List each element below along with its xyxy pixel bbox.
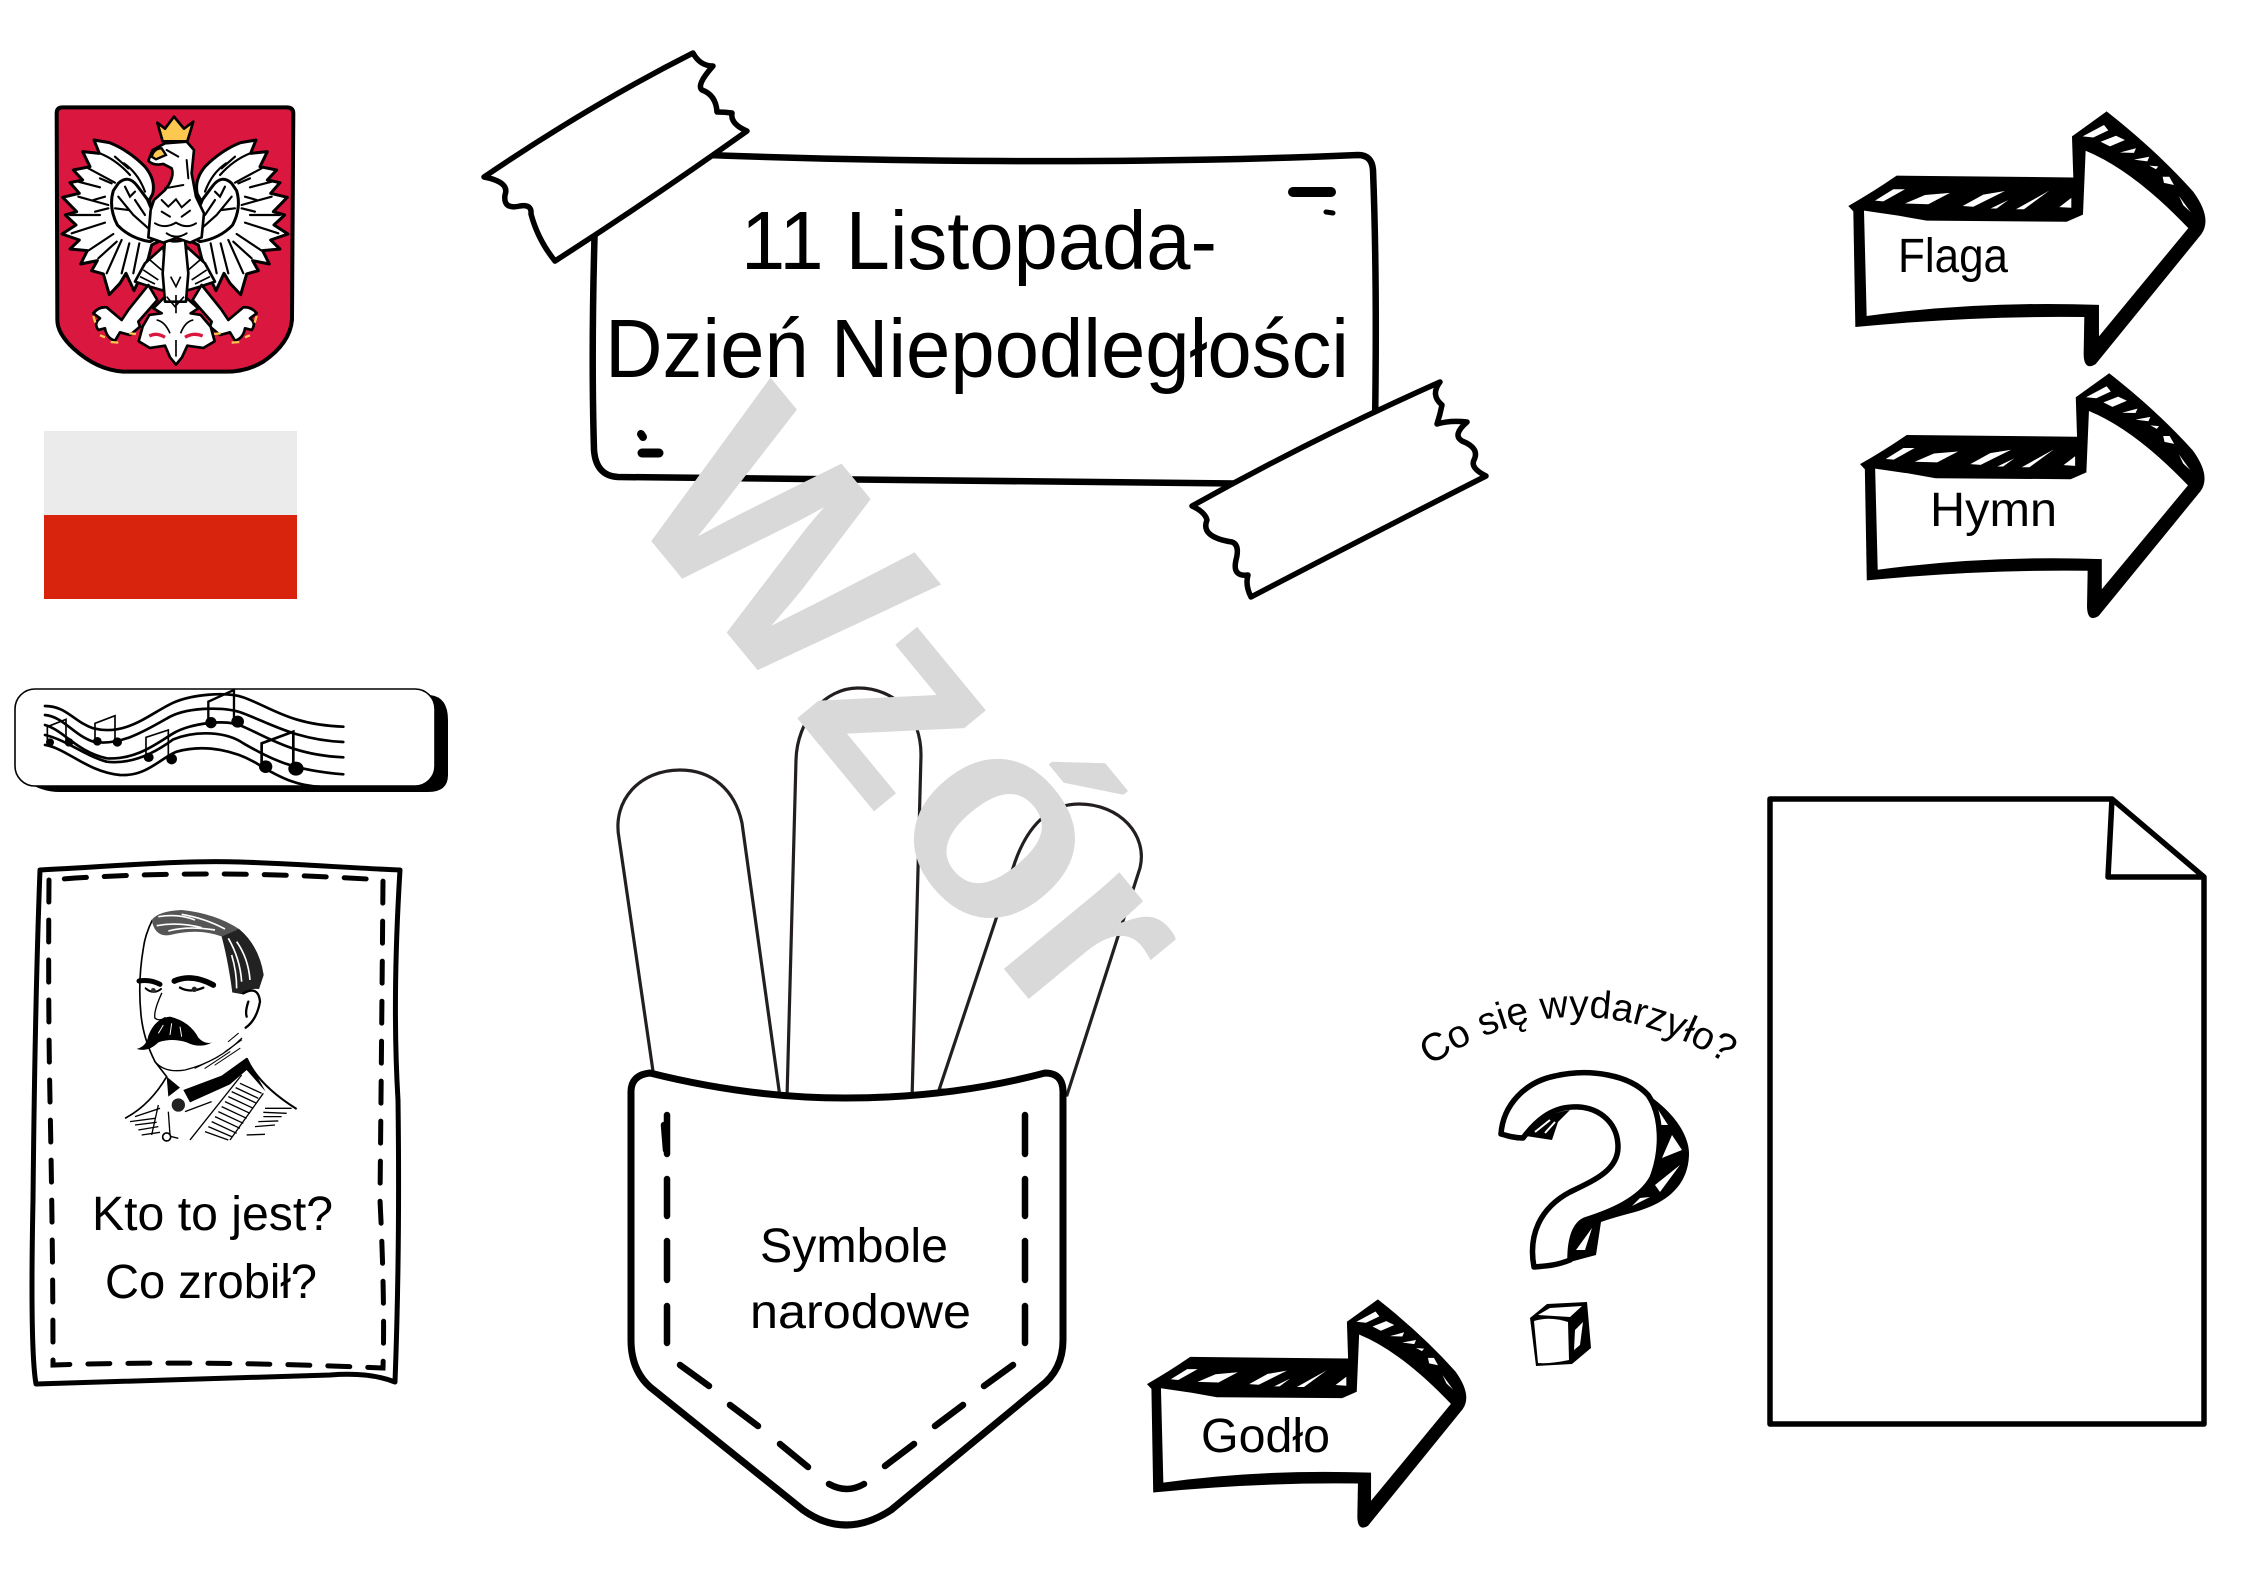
pocket stitching — [664, 1115, 1025, 1489]
stitched dashes — [49, 874, 384, 1368]
panel: coat of arms of Poland — [57, 107, 293, 372]
label: Flaga: Flaga — [1898, 230, 2008, 283]
panel: title sign — [484, 53, 1486, 597]
panel: pocket with paper strips — [618, 688, 1141, 1525]
shield — [57, 107, 293, 372]
title frame — [593, 152, 1376, 484]
white eagle — [62, 117, 288, 365]
pocket text line 2: narodowe — [750, 1286, 971, 1339]
curved caption: Co się wydarzyło? — [1422, 990, 1736, 1060]
icon: music staff and notes — [45, 690, 343, 787]
banner box with shadow — [15, 689, 448, 792]
question mark dot — [1530, 1302, 1591, 1366]
title line 2: Dzień Niepodległości — [605, 302, 1349, 395]
arrow: Flaga — [1848, 111, 2205, 366]
panel: question mark with caption — [1422, 990, 1736, 1366]
question mark body — [1501, 1073, 1689, 1267]
panel: portrait card — [32, 862, 400, 1384]
flag of Poland — [44, 431, 297, 599]
arrow: Hymn — [1860, 373, 2205, 618]
title line 1: 11 Listopada- — [741, 194, 1217, 287]
hand-drawn card frame — [32, 862, 400, 1384]
blank document page — [1770, 799, 2204, 1424]
portrait of a man with a moustache — [125, 910, 297, 1142]
frame accent marks — [641, 192, 1333, 453]
crown — [157, 117, 193, 141]
beak — [152, 148, 166, 159]
pocket text line 1: Symbole — [760, 1220, 948, 1273]
watermark: Wzór: Wzór — [572, 339, 1260, 1078]
text: who is this: Kto to jest? — [92, 1188, 333, 1241]
pocket body — [631, 1073, 1063, 1525]
label: Hymn: Hymn — [1930, 484, 2057, 537]
tape bottom right — [1192, 382, 1486, 597]
strip 2 — [787, 688, 921, 1100]
arrow: Godło — [1147, 1299, 1466, 1528]
strip 1 — [618, 770, 780, 1097]
label: Godło: Godło — [1201, 1410, 1330, 1463]
text: what did he do: Co zrobił? — [105, 1256, 317, 1309]
strip 3 — [939, 804, 1141, 1095]
panel: anthem music banner — [15, 689, 448, 792]
tape top left — [484, 53, 747, 261]
